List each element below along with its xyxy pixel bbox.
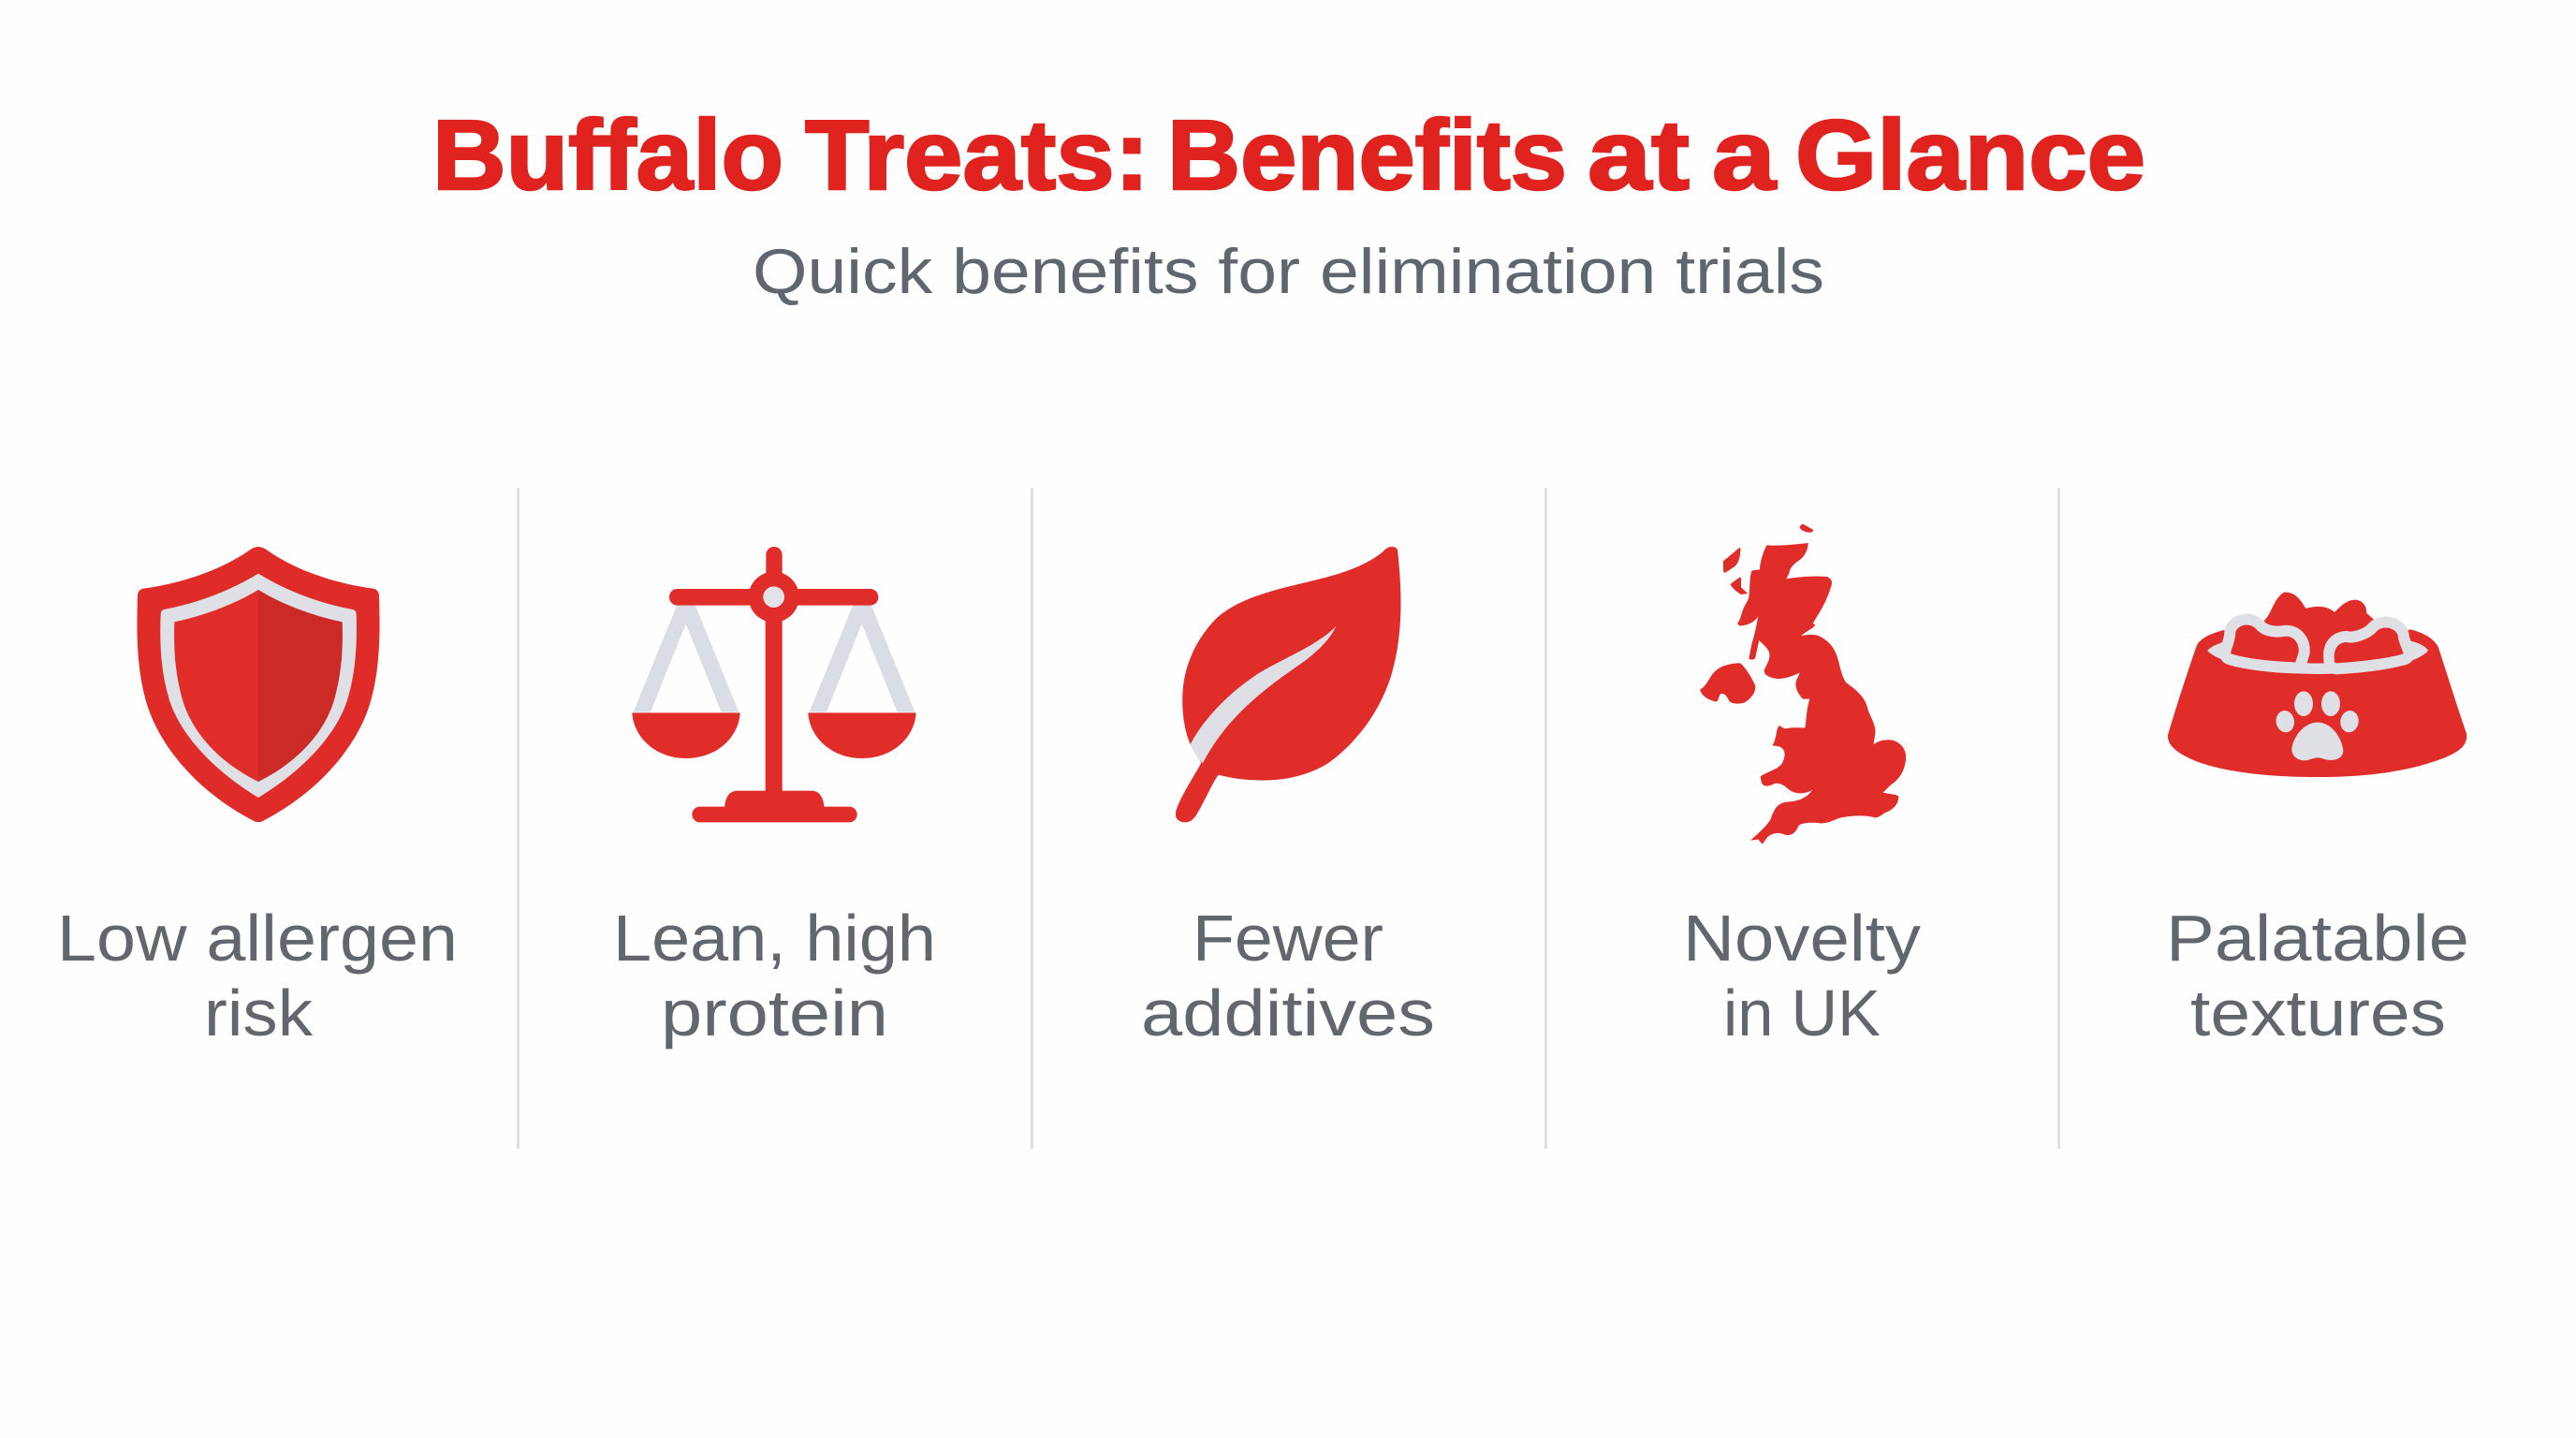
title: at: [1588, 100, 1690, 211]
title: Buffalo: [432, 100, 783, 211]
label: palatable textures: textures: [2190, 976, 2446, 1049]
icon: balance scales: [632, 547, 916, 822]
label: fewer additives: additives: [1141, 976, 1435, 1049]
label: low allergen risk: Low allergen: [57, 902, 458, 975]
panel: fewer additives: [1141, 547, 1435, 1049]
icon: UK map: [1700, 524, 1906, 844]
icon: leaf: [1176, 547, 1401, 822]
panel: lean high protein: [613, 547, 936, 1049]
label: palatable textures: Palatable: [2166, 902, 2469, 975]
label: fewer additives: Fewer: [1193, 902, 1383, 975]
icon: food bowl with paw: [2168, 593, 2466, 777]
label: low allergen risk: risk: [204, 976, 314, 1049]
panel: palatable textures: [2166, 593, 2469, 1049]
title: Glance: [1795, 100, 2145, 211]
icon: shield: [137, 547, 380, 822]
subtitle: Quick benefits for elimination trials: [753, 236, 1824, 307]
panel: novelty in UK: [1683, 524, 1921, 1049]
label: novelty in UK: Novelty: [1683, 902, 1921, 975]
title: a: [1712, 100, 1777, 211]
title: Benefits: [1167, 100, 1567, 211]
panel: low allergen risk: [57, 547, 458, 1049]
label: lean high protein: Lean, high: [613, 902, 936, 975]
label: novelty in UK: in UK: [1723, 976, 1881, 1049]
label: lean high protein: protein: [661, 976, 888, 1049]
title: Treats:: [805, 100, 1149, 211]
